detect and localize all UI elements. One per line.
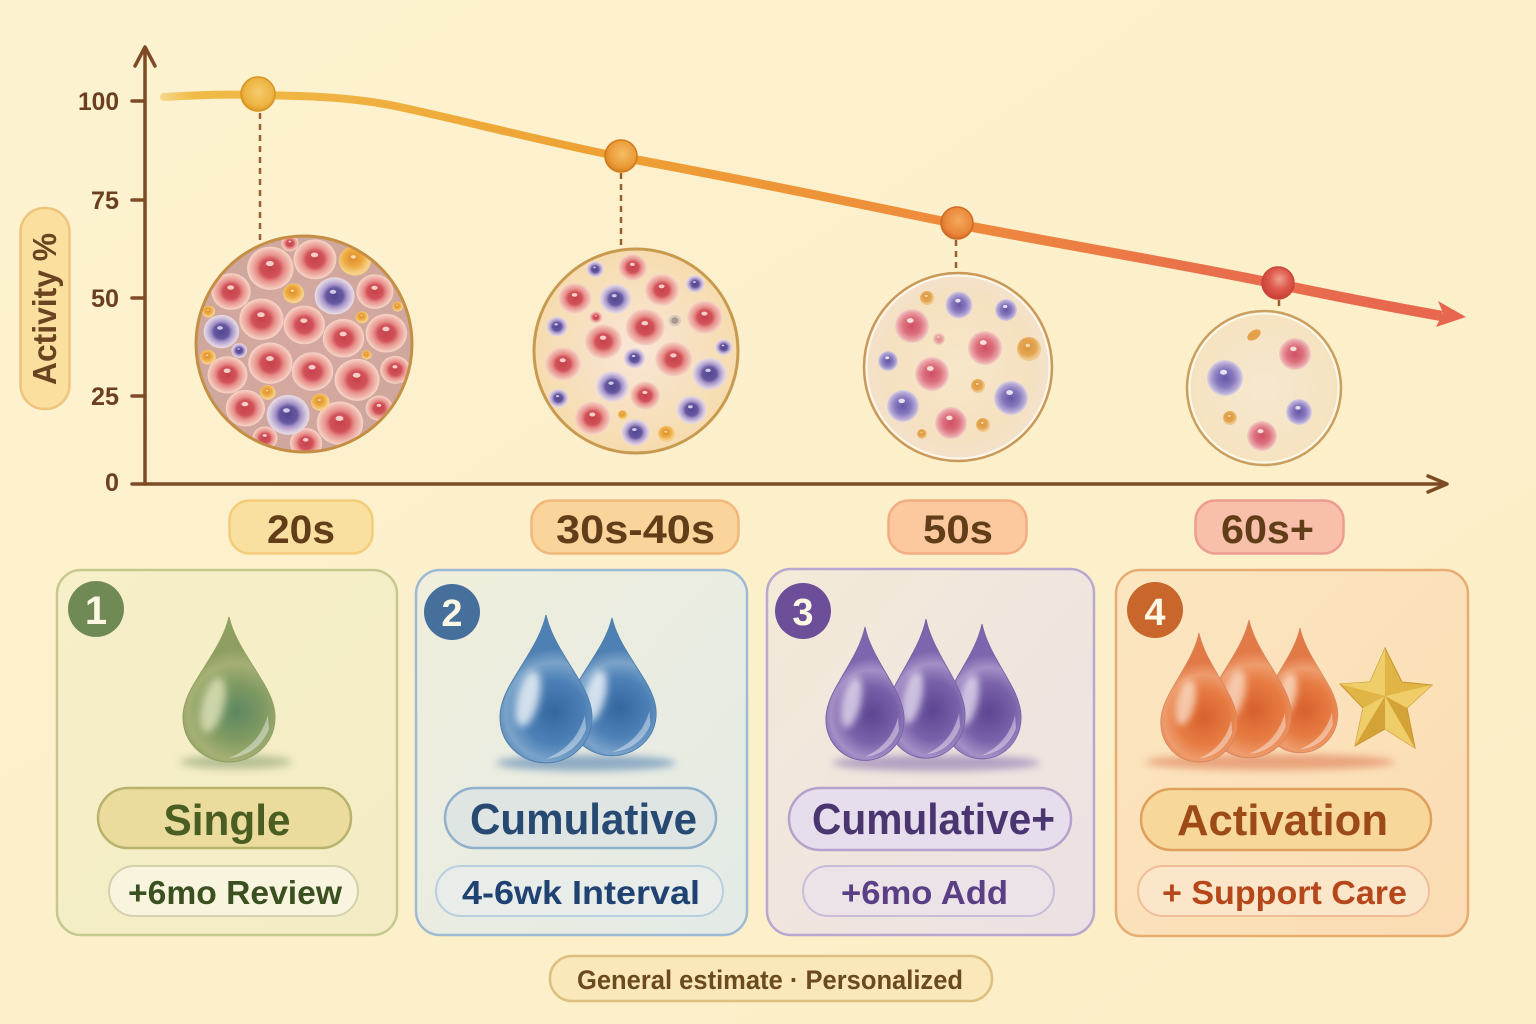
pill: +6mo Review bbox=[109, 866, 358, 916]
cell circle: 60s+ very sparse bbox=[1187, 311, 1341, 465]
curve arrowhead bbox=[1436, 301, 1466, 327]
pill: + Support Care bbox=[1138, 866, 1429, 916]
activity curve bbox=[164, 95, 1442, 316]
badge 1 bbox=[68, 581, 124, 637]
y axis tick labels bbox=[78, 88, 119, 497]
pill: Cumulative+: Cumulative+ bbox=[812, 795, 1055, 844]
marker: 50s bbox=[941, 207, 973, 239]
marker: 30s-40s bbox=[605, 140, 637, 172]
y axis tick labels: 100 bbox=[78, 88, 119, 116]
footnote: General estimate · Personalized bbox=[550, 956, 992, 1001]
panel: 4 Activation bbox=[1116, 570, 1468, 936]
icon: three purple drops bbox=[826, 619, 1040, 771]
age label: 60s+ bbox=[1196, 500, 1344, 554]
badge 4: 4 bbox=[1144, 592, 1166, 634]
age label: 20s bbox=[230, 500, 372, 554]
age label: 60s+: 60s+ bbox=[1221, 508, 1314, 552]
y axis tick labels: 25 bbox=[91, 383, 119, 411]
cell circle: 30s-40s moderate bbox=[534, 249, 738, 453]
y axis tick labels: 0 bbox=[105, 469, 119, 497]
marker: 20s bbox=[241, 77, 275, 111]
y axis bbox=[132, 47, 155, 484]
pill: 4-6wk Interval: 4-6wk Interval bbox=[462, 874, 700, 911]
icon: three orange drops bbox=[1145, 620, 1395, 770]
badge 2: 2 bbox=[441, 593, 463, 635]
age label: 50s bbox=[888, 500, 1026, 554]
y axis tick labels: 75 bbox=[91, 187, 119, 215]
badge 1: 1 bbox=[85, 589, 107, 633]
dashed connectors bbox=[260, 113, 1279, 310]
pill: + Support Care: + Support Care bbox=[1162, 874, 1407, 911]
y axis title: Activity %: Activity % bbox=[26, 233, 63, 385]
age label: 20s: 20s bbox=[267, 508, 335, 552]
x axis bbox=[132, 476, 1447, 492]
y axis tick labels: 50 bbox=[91, 285, 119, 313]
pill: Cumulative: Cumulative bbox=[470, 795, 697, 844]
pill: +6mo Add: +6mo Add bbox=[841, 874, 1008, 911]
badge 3: 3 bbox=[792, 592, 814, 634]
pill: +6mo Review: +6mo Review bbox=[128, 874, 342, 911]
badge 2 bbox=[424, 584, 480, 640]
cell circle: 50s sparse bbox=[864, 273, 1052, 461]
pill: +6mo Add bbox=[803, 866, 1054, 916]
marker: 60s+ bbox=[1262, 267, 1294, 299]
pill: 4-6wk Interval bbox=[436, 866, 723, 916]
pill: Activation: Activation bbox=[1177, 796, 1388, 845]
pill: Activation bbox=[1141, 789, 1431, 850]
cell circle: 20s dense bbox=[196, 235, 412, 458]
badge 3 bbox=[775, 583, 831, 639]
icon: two blue drops bbox=[496, 615, 676, 771]
line chart bbox=[20, 47, 1466, 497]
badge 4 bbox=[1127, 582, 1183, 638]
age label: 50s: 50s bbox=[923, 508, 993, 552]
panel: 3 Cumulative+ bbox=[767, 569, 1094, 935]
age label: 30s-40s bbox=[532, 500, 738, 554]
icon: gold star bbox=[1340, 648, 1432, 748]
panel: 2 Cumulative bbox=[416, 570, 747, 935]
age label: 30s-40s: 30s-40s bbox=[556, 508, 715, 552]
pill: Single: Single bbox=[164, 796, 290, 845]
pill: Single bbox=[98, 788, 351, 848]
panel: 1 Single bbox=[57, 570, 397, 935]
footnote: General estimate · Personalized: General estimate · Personalized bbox=[577, 965, 963, 995]
y axis title: Activity % bbox=[20, 208, 70, 409]
icon: green drop bbox=[180, 617, 292, 769]
